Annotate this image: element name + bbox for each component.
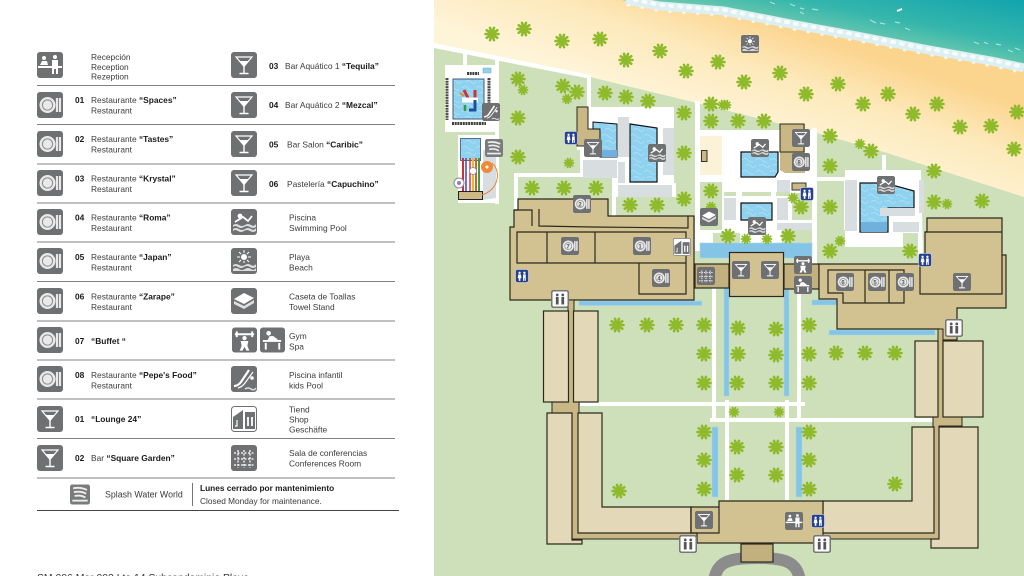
panel: legend	[37, 52, 399, 576]
row dividers	[37, 86, 395, 478]
icon: bar lobby	[695, 511, 713, 529]
water channels	[579, 243, 935, 497]
icon: restaurant 6	[836, 273, 854, 291]
legend: bar mezcal: Bar Aquático 2 “Mezcal”	[285, 100, 378, 110]
legend: conference room: Conferences Room	[289, 458, 361, 468]
legend: bar square garden: Bar “Square Garden”	[91, 453, 175, 463]
legend: restaurant 03: Restaurant	[91, 184, 133, 194]
legend: pasteleria capuchino	[231, 170, 379, 196]
legend: restaurant 03: Restaurante “Krystal”	[91, 174, 176, 184]
legend: restaurant 02: 02	[75, 134, 85, 144]
icon: restaurant 2: 2	[578, 202, 582, 208]
legend: pasteleria capuchino: 06	[269, 179, 279, 189]
legend: restaurant 01	[37, 92, 177, 118]
legend: restaurant 06	[37, 288, 175, 314]
legend: pasteleria capuchino: Pastelería “Capuchino”	[287, 179, 379, 189]
legend: towel stand	[231, 288, 355, 314]
legend: buffet 07	[37, 327, 126, 353]
legend: restaurant 05	[37, 248, 172, 274]
sea	[622, 0, 1024, 73]
lobby	[691, 501, 823, 562]
icon: shop	[673, 238, 691, 256]
legend: gym and spa	[232, 328, 307, 352]
lawn patches	[616, 108, 918, 264]
icon: beach	[741, 35, 759, 53]
icon: restrooms east	[919, 254, 931, 266]
legend: lounge 24: “Lounge 24”	[91, 414, 141, 424]
west wing	[544, 300, 697, 544]
legend: buffet 07: “Buffet “	[91, 336, 126, 346]
legend: restaurant 02: Restaurante “Tastes”	[91, 134, 173, 144]
pool: east	[860, 183, 915, 232]
icon: pool north	[751, 139, 769, 157]
icon: restaurant 8	[792, 153, 810, 171]
legend: kids pool	[231, 366, 343, 392]
callout: closed monday: Closed Monday for maintenance.	[200, 496, 322, 506]
legend: restaurant 06: 06	[75, 292, 85, 302]
icon: elevator west	[552, 291, 568, 307]
pool and mezcal bar	[741, 124, 806, 190]
driveway	[714, 558, 800, 576]
legend: lounge 24: 01	[75, 414, 85, 424]
legend: bar square garden	[37, 445, 175, 471]
icon: restaurant 3	[896, 273, 914, 291]
icon: restrooms west pool	[565, 132, 577, 144]
legend: restaurant 03	[37, 170, 176, 196]
icon: spa	[794, 276, 812, 294]
icon: restaurant 7: 7	[566, 244, 570, 250]
legend: towel stand: Towel Stand	[289, 302, 335, 312]
legend: bar caribic	[231, 131, 363, 157]
icon: bar east	[953, 273, 971, 291]
legend: splash water world	[70, 484, 183, 504]
callout: closed monday	[192, 483, 334, 506]
legend: restaurant 08: 08	[75, 370, 85, 380]
legend: restaurant 01: Restaurant	[91, 106, 133, 116]
legend: reception: Recepción	[91, 52, 131, 62]
icon: restaurant 7	[561, 237, 579, 255]
legend: restaurant 01: Restaurante “Spaces”	[91, 95, 177, 105]
legend: restaurant 04: Restaurant	[91, 223, 133, 233]
legend: splash water world: Splash Water World	[105, 490, 183, 500]
legend: bar mezcal	[231, 92, 378, 118]
pool and tequila bar	[577, 107, 657, 182]
icon: conference room	[697, 267, 715, 285]
icon: restaurant 1: 1	[638, 244, 642, 250]
legend: bar caribic: Bar Salon “Caribic”	[287, 140, 363, 150]
icon: bar square garden	[761, 261, 779, 279]
icon: restaurant 4: 4	[657, 276, 661, 282]
icon: restrooms lobby	[812, 515, 824, 527]
icon: reception	[785, 512, 803, 530]
legend: buffet 07: 07	[75, 336, 85, 346]
legend: restaurant 08: Restaurante “Pepe's Food”	[91, 370, 197, 380]
icon: elevator lobby east	[814, 536, 830, 552]
icon: restaurant 1	[633, 237, 651, 255]
legend: lounge 24	[37, 406, 141, 432]
legend: reception: Rezeption	[91, 72, 129, 82]
legend: restaurant 05: 05	[75, 252, 85, 262]
legend: kids pool: kids Pool	[289, 380, 323, 390]
water park: slides pool	[447, 68, 491, 124]
building: central	[730, 252, 784, 296]
legend: shop: Geschäfte	[289, 424, 328, 434]
white paths	[434, 43, 934, 500]
legend: restaurant 04: Restaurante “Roma”	[91, 212, 171, 222]
legend: restaurant 06: Restaurante “Zarape”	[91, 292, 175, 302]
icon: bar caribic	[792, 129, 810, 147]
panel: resort map	[434, 0, 1024, 576]
legend: bar square garden: 02	[75, 453, 85, 463]
icon: water slide	[485, 139, 503, 157]
legend: restaurant 08	[37, 366, 197, 392]
icon: bar lounge	[732, 261, 750, 279]
legend: restaurant 02	[37, 131, 173, 157]
legend: gym and spa: Spa	[289, 342, 304, 352]
legend: restaurant 02: Restaurant	[91, 144, 133, 154]
legend: gym and spa: Gym	[289, 331, 307, 341]
legend: conference room: Sala de conferencias	[289, 448, 367, 458]
map icons	[482, 35, 971, 552]
legend: restaurant 05: Restaurant	[91, 262, 133, 272]
legend: swimming pool: Piscina	[289, 212, 316, 222]
legend: reception: Reception	[91, 62, 129, 72]
icon: pool centre	[748, 217, 766, 235]
legend: restaurant 01: 01	[75, 95, 85, 105]
building: main east	[819, 218, 1006, 340]
legend: swimming pool: Swimming Pool	[289, 223, 347, 233]
legend: beach: Beach	[289, 262, 313, 272]
legend: bar caribic: 05	[269, 140, 279, 150]
legend: restaurant 06: Restaurant	[91, 302, 133, 312]
icon: restaurant 4	[652, 269, 670, 287]
icon: restrooms main	[516, 270, 528, 282]
legend: beach: Playa	[289, 252, 310, 262]
building: main west	[510, 199, 694, 300]
legend: beach	[231, 248, 313, 274]
connector west	[695, 264, 729, 288]
icon: restaurant 3: 3	[901, 280, 905, 286]
icon: elevator east	[946, 320, 962, 336]
gray pads	[583, 128, 924, 232]
icon: elevator lobby west	[680, 536, 696, 552]
legend: bar tequila	[231, 52, 379, 78]
legend: shop: Shop	[289, 414, 309, 424]
icon: restaurant 8: 8	[797, 160, 801, 166]
legend: bar tequila: 03	[269, 61, 279, 71]
icon: bar tequila	[584, 139, 602, 157]
legend: towel stand: Caseta de Toallas	[289, 292, 355, 302]
icon: towel stand	[700, 208, 718, 226]
east wing	[823, 329, 983, 548]
icon: pool east	[877, 176, 895, 194]
legend: swimming pool	[231, 209, 347, 235]
legend: bar mezcal: 04	[269, 100, 279, 110]
icon: restaurant 5	[868, 273, 886, 291]
connector east	[784, 264, 819, 289]
legend: kids pool: Piscina infantil	[289, 370, 343, 380]
icon: pool west	[648, 144, 666, 162]
icon: kids pool	[482, 103, 500, 121]
legend: restaurant 05: Restaurante “Japan”	[91, 252, 172, 262]
icon: restaurant 6: 6	[841, 280, 845, 286]
pool: centre	[741, 203, 772, 220]
icon: restrooms north	[801, 188, 813, 200]
palms	[486, 23, 1024, 497]
legend: shop: Tiend	[289, 404, 310, 414]
legend: restaurant 04: 04	[75, 212, 85, 222]
callout: closed monday: Lunes cerrado por mantenimiento	[200, 483, 334, 493]
lawn	[434, 45, 1024, 576]
icon: restaurant 2	[573, 195, 591, 213]
beach	[434, 0, 1024, 240]
legend: bar tequila: Bar Aquático 1 “Tequila”	[285, 61, 379, 71]
small kiosk	[700, 136, 722, 175]
legend: conference room	[231, 445, 367, 471]
legend: reception	[37, 52, 131, 82]
legend: restaurant 03: 03	[75, 174, 85, 184]
icon: restaurant 5: 5	[873, 280, 877, 286]
legend: restaurant 08: Restaurant	[91, 380, 133, 390]
water park: splash water world	[454, 138, 497, 200]
icon: gym	[794, 256, 812, 274]
legend: shop	[232, 404, 328, 434]
legend: restaurant 04	[37, 209, 171, 235]
